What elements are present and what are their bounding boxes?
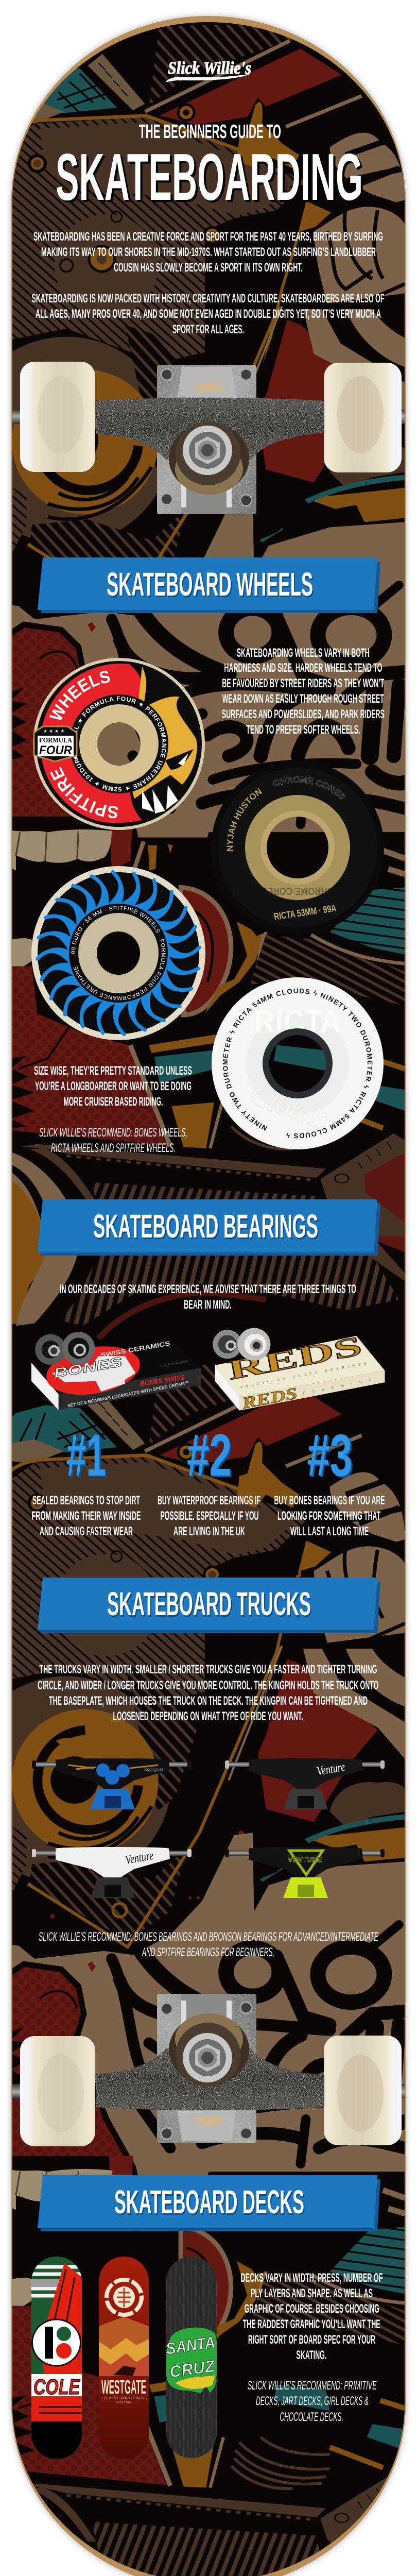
banner: skateboard bearings [38, 1199, 380, 1256]
banner: skateboard wheels [38, 557, 380, 613]
product: Bones Reds bearings box: REDS [225, 1330, 364, 1386]
wheel: Spitfire red [33, 658, 205, 830]
product: Bones Reds bearings box: PRECISION SKATE BEARINGS [240, 1361, 369, 1389]
trucks text [38, 1663, 378, 1723]
deck: Element Westgate: EST.1992 [116, 2401, 132, 2404]
truck: black Venture: Venture [316, 1760, 346, 1778]
tip #3: #3 [307, 1422, 353, 1488]
wheels text left: MORE CRUISER BASED RIDING. [64, 1095, 163, 1109]
truck: black with blue roses [32, 1758, 192, 1809]
decks text: SKATING. [296, 2348, 326, 2362]
deck: Element Westgate: ELEMENT SKATEBOARDS [101, 2397, 147, 2400]
truck: black Venture [225, 1758, 385, 1809]
product: Bones Swiss bearings box: SWISS CERAMICS [100, 1340, 171, 1359]
wheel: Spitfire red: WHEELS [49, 671, 110, 720]
wheel: Ricta chrome core black: NYJAH HUSTON [227, 788, 262, 851]
logo: Slick Willie's: Slick Willie's [168, 59, 251, 78]
tip #1: FROM MAKING THEIR WAY INSIDE [32, 1509, 141, 1523]
deck: Element Westgate [99, 2257, 149, 2459]
banner: skateboard trucks [38, 1578, 380, 1633]
wheels recommendation: SLICK WILLIE’S RECOMMEND: BONES WHEELS, [39, 1126, 187, 1140]
truck: black and neon Venture: VENTURE [288, 1856, 322, 1863]
badge: formula four: ★★★★ [43, 728, 66, 734]
deck: Plan B Cole: COLE [33, 2375, 81, 2399]
wheel: Ricta Clouds white: NINETY TWO DUROMETER ϟ RICTA 54MM CLOUDS ϟ NINETY TWO DUROMETER ϟ RICTA 54MM CLOUDS ϟ [222, 988, 373, 1139]
tip #1 [32, 1422, 141, 1538]
wheel: Ricta chrome core black: CHROME CORES [273, 776, 345, 800]
intro paragraph 2 [32, 292, 385, 336]
wheels text left: SIZE WISE, THEY’RE PRETTY STANDARD UNLESS [34, 1064, 192, 1078]
decks recommendation: CHOCOLATE DECKS. [280, 2410, 343, 2424]
badge: formula four: FORMULA [39, 737, 73, 744]
product: Bones Swiss bearings box: BONES [53, 1355, 123, 1381]
tip #1: SEALED BEARINGS TO STOP DIRT [32, 1494, 140, 1507]
intro paragraph 1 [33, 230, 383, 275]
deck: Plan B Cole [31, 2257, 82, 2459]
subtitle: THE BEGINNERS GUIDE TO [139, 121, 281, 143]
product: Bones Swiss bearings box: SET OF 8 BEARINGS LUBRICATED WITH SPEED CREAM™ [67, 1380, 189, 1409]
tip #2: POSSIBLE. ESPECIALLY IF YOU [161, 1509, 258, 1523]
deck: Santa Cruz: SANTA [165, 2333, 216, 2358]
wheel: Spitfire blue swirl: 99 DURO · 56 MM · SPITFIRE WHEELS · FORMULA FOUR PERFORMANCE URETHANE [71, 906, 166, 1001]
tip #1: #1 [66, 1422, 106, 1488]
trucks recommendation [39, 1930, 379, 1959]
truck: white Venture: Venture [125, 1849, 154, 1867]
wheels text left [34, 1064, 192, 1109]
tip #3 [274, 1422, 385, 1538]
tip #1: AND CAUSING FASTER WEAR [40, 1524, 133, 1538]
truck: black and neon Venture [225, 1847, 385, 1898]
bearings intro: BEAR IN MIND. [184, 1298, 232, 1312]
decks text [241, 2271, 383, 2362]
product: Bones Swiss bearings box [31, 1332, 201, 1410]
wheel: Ricta chrome core black [212, 768, 384, 927]
wheel: Ricta chrome core black: CHROME CORES [262, 885, 334, 896]
deck: Santa Cruz [165, 2257, 218, 2458]
wheel: Spitfire red: SPITFIRE [50, 767, 118, 818]
top truck with wheels [12, 362, 405, 514]
trucks recommendation: AND SPITFIRE BEARINGS FOR BEGINNERS. [142, 1945, 274, 1959]
tip #2: ARE LIVING IN THE UK [173, 1524, 245, 1538]
tip #2: BUY WATERPROOF BEARINGS IF [158, 1494, 260, 1507]
bottom truck with wheels [12, 1994, 405, 2146]
wheel: Ricta Clouds white: RICTA [254, 1004, 341, 1040]
decks recommendation [248, 2379, 377, 2424]
wheel: Ricta Clouds white: Clouds [246, 1079, 333, 1137]
product: Bones Reds bearings box: CERAMICS [303, 1379, 371, 1395]
badge: formula four [34, 726, 77, 761]
wheel: Spitfire red: ★ RADIAL ★ FORMULA FOUR ★ PERFORMANCE URETHANE ★ 52MM ★ 101DURO [73, 697, 167, 791]
bearings intro [60, 1282, 356, 1312]
intro paragraph 2: SPORT FOR ALL AGES. [172, 323, 244, 336]
product: Bones Reds bearings box [213, 1328, 385, 1412]
product: Bones Swiss bearings box: COMPETITION SKATE [159, 1360, 189, 1368]
wheels text left: YOU’RE A LONGBOARDER OR WANT TO BE DOING [35, 1079, 192, 1093]
truck: black with blue roses: Rodriguez [144, 1767, 163, 1772]
badge: formula four: FOUR [39, 743, 73, 757]
skateboard infographic canvas: WESTGATE [101, 2377, 146, 2398]
product: Bones Reds bearings box: REDS [240, 1384, 299, 1412]
wheels recommendation: RICTA WHEELS AND SPITFIRE WHEELS. [51, 1141, 176, 1155]
tip #2: #2 [187, 1422, 232, 1488]
tip #2 [158, 1422, 260, 1538]
deck: Santa Cruz: CRUZ [168, 2357, 217, 2381]
wheel: Spitfire blue swirl [31, 866, 205, 1040]
wheels recommendation [39, 1126, 187, 1155]
truck: white Venture [32, 1847, 192, 1898]
wheel: Ricta chrome core black: RICTA 53MM · 99A [273, 903, 337, 923]
wheels text [222, 646, 385, 737]
banner: skateboard decks [38, 2175, 380, 2231]
product: Bones Swiss bearings box: BONES SWISS [140, 1373, 185, 1388]
